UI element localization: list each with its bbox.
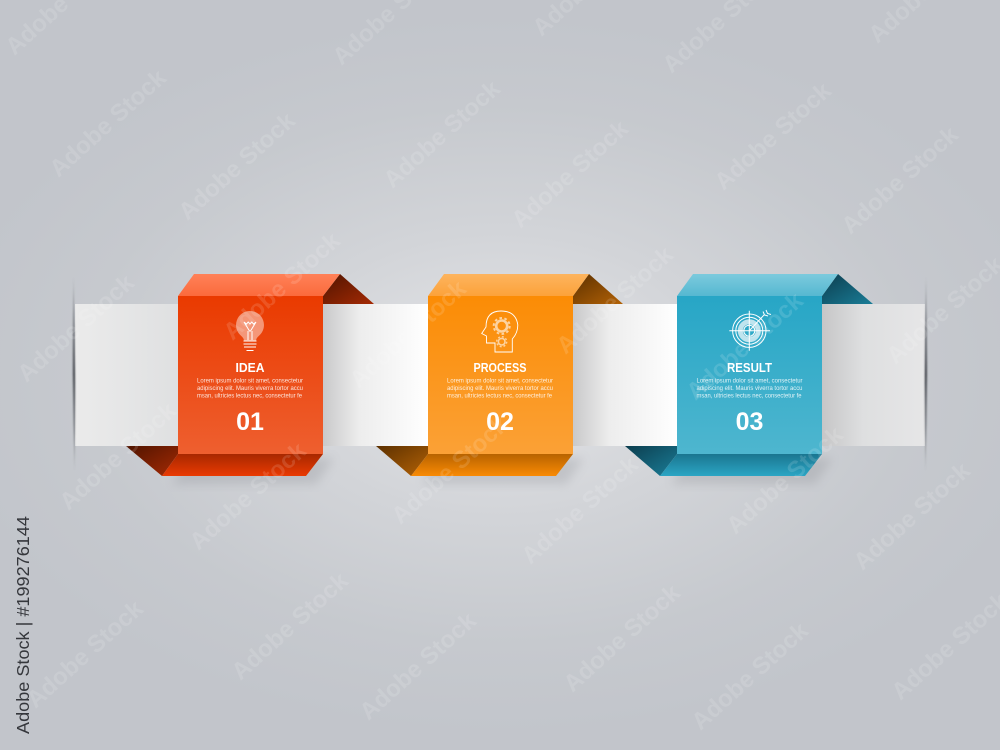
stock id label: Adobe Stock | #199276144 <box>13 516 33 734</box>
stock watermarks: Adobe Stock <box>516 451 644 570</box>
text block: idea: Lorem ipsum dolor sit amet, consectetur <box>197 378 304 384</box>
text block: result <box>696 378 803 400</box>
icon: light bulb <box>236 311 264 350</box>
stock watermarks: Adobe Stock <box>558 579 686 698</box>
text block: result: msan, ultricies lectus nec, consectetur fe <box>696 392 802 400</box>
stock watermarks: Adobe Stock <box>173 107 301 226</box>
left slit <box>73 277 75 471</box>
panel: result <box>625 274 873 484</box>
stock watermarks: Adobe Stock <box>721 421 849 540</box>
stock watermarks: Adobe Stock <box>551 241 679 360</box>
heading: process: PROCESS <box>474 361 526 375</box>
stock watermarks: Adobe Stock <box>21 595 149 714</box>
stock watermarks: Adobe Stock <box>54 397 182 516</box>
stock watermarks: Adobe Stock <box>386 411 514 530</box>
heading: idea: IDEA <box>236 361 264 375</box>
stock watermarks: Adobe Stock <box>378 75 506 194</box>
number: 01: 01 <box>236 408 264 436</box>
stock watermarks: Adobe Stock <box>44 64 172 183</box>
icon: head with gears <box>482 311 518 352</box>
text block: idea: msan, ultricies lectus nec, consectetur fe <box>197 392 302 400</box>
stock watermarks: Adobe Stock <box>354 607 482 726</box>
paper band <box>75 304 925 446</box>
stock watermarks: Adobe Stock <box>848 457 976 576</box>
number: 02: 02 <box>486 408 514 436</box>
stock watermarks: Adobe Stock <box>709 77 837 196</box>
text block: result: Lorem ipsum dolor sit amet, consectetur <box>696 378 803 384</box>
stock watermarks: Adobe Stock <box>836 121 964 240</box>
text block: idea: adipiscing elit. Mauris viverra tortor accu <box>197 385 303 392</box>
stock watermarks: Adobe Stock <box>681 287 809 406</box>
stock watermarks: Adobe Stock <box>12 269 140 388</box>
heading: result: RESULT <box>727 361 772 375</box>
text block: process <box>447 378 554 400</box>
stock watermarks: Adobe Stock <box>686 617 814 736</box>
text block: process: adipiscing elit. Mauris viverra tortor accu <box>447 385 553 392</box>
icon: target <box>729 310 771 351</box>
stock watermarks: Adobe Stock <box>506 115 634 234</box>
text block: idea <box>197 378 304 400</box>
text block: result: adipiscing elit. Mauris viverra tortor accu <box>696 385 803 392</box>
panel: process <box>376 274 623 484</box>
stock watermarks: Adobe Stock <box>184 437 312 556</box>
panel: idea <box>126 274 374 484</box>
stock watermarks: Adobe Stock <box>344 275 472 394</box>
text block: process: Lorem ipsum dolor sit amet, consectetur <box>447 378 554 384</box>
number: 03: 03 <box>736 408 763 436</box>
stock watermarks: Adobe Stock <box>218 227 346 346</box>
stock watermarks: Adobe Stock <box>226 567 354 686</box>
text block: process: msan, ultricies lectus nec, consectetur fe <box>447 392 552 400</box>
right slit <box>925 277 927 471</box>
